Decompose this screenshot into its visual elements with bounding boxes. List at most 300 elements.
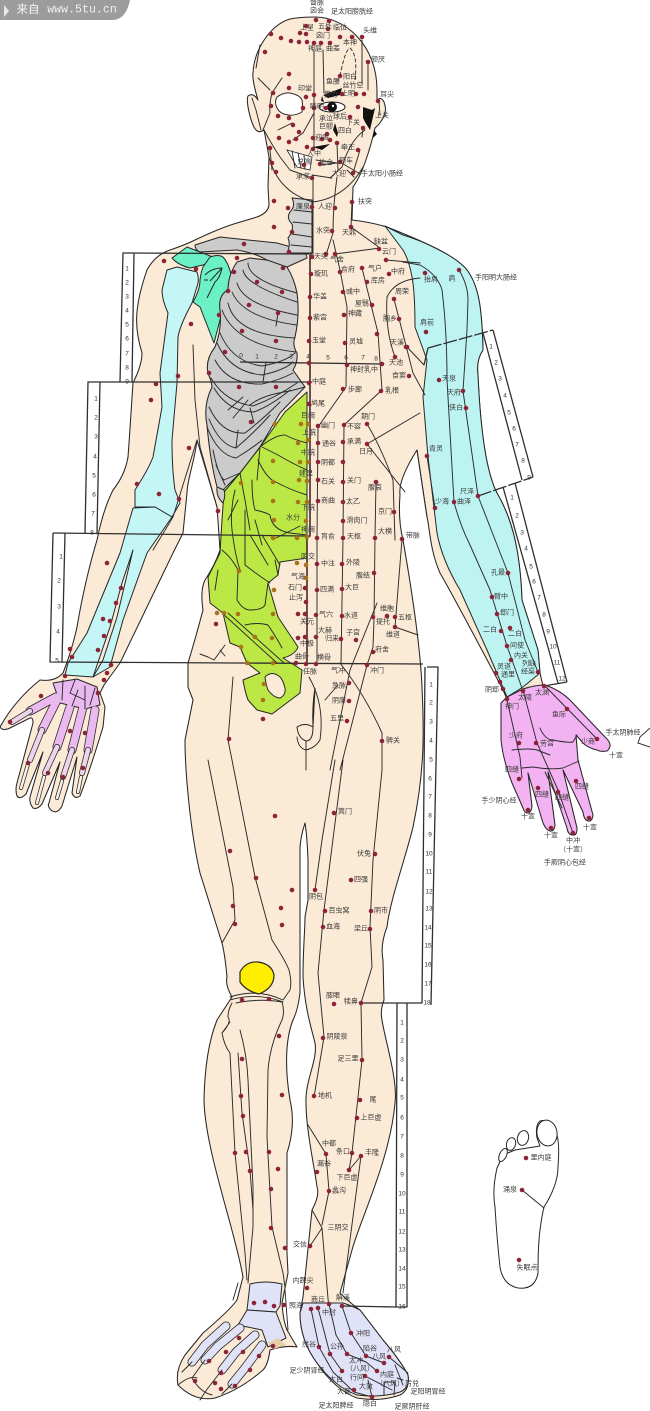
labels: right arm and hand: 手厥阴心包经 bbox=[544, 858, 586, 866]
labels: right arm and hand: 间使 bbox=[510, 640, 524, 650]
ruler: abdomen left: 3 bbox=[57, 604, 61, 610]
labels: chest and abdomen: 水道 bbox=[344, 610, 358, 620]
labels: chest and abdomen: 神藏 bbox=[348, 308, 362, 318]
ruler: lower leg: 12 bbox=[398, 1228, 406, 1236]
labels: chest and abdomen: 归来 bbox=[325, 634, 339, 642]
ruler: chest scale: 2 bbox=[274, 354, 278, 360]
labels: chest and abdomen: 步廊 bbox=[348, 384, 362, 394]
ruler: abdomen left: 2 bbox=[57, 578, 61, 584]
labels: chest and abdomen: 俞府 bbox=[341, 264, 355, 274]
labels: legs: 足三里 bbox=[338, 1054, 358, 1062]
labels: head and neck: 承泣 bbox=[319, 114, 333, 122]
ruler: chest scale: 6 bbox=[344, 354, 348, 362]
labels: chest and abdomen: 关元 bbox=[300, 616, 314, 626]
labels: right arm and hand: 四缝 bbox=[575, 782, 589, 790]
left leg bones bbox=[208, 677, 291, 1287]
labels: right arm and hand: 十宣 bbox=[609, 750, 623, 760]
panel: right hand bbox=[501, 685, 610, 835]
labels: feet: 隐白 bbox=[363, 1398, 377, 1408]
icon: forearm divider bbox=[93, 550, 133, 677]
labels: chest and abdomen: 紫宫 bbox=[313, 312, 327, 322]
labels: feet: 太冲 bbox=[349, 1356, 363, 1364]
labels: chest and abdomen: 天池 bbox=[389, 358, 403, 366]
ruler: chest scale: 7 bbox=[361, 354, 365, 362]
icon: left scapula and clavicle bbox=[172, 247, 232, 343]
labels: head and neck: 人中 bbox=[307, 148, 321, 158]
labels: chest and abdomen: 外陵 bbox=[346, 558, 360, 566]
labels: right arm and hand: 曲泽 bbox=[457, 496, 471, 506]
labels: head and neck: 上关 bbox=[375, 110, 389, 120]
labels: chest and abdomen: 任脉 bbox=[303, 666, 317, 676]
ruler: right forearm: 1 bbox=[510, 494, 514, 502]
labels: right arm and hand: 通里 bbox=[501, 670, 515, 678]
labels: chest and abdomen: 滑肉门 bbox=[346, 516, 368, 524]
labels: head and neck: 廉泉 bbox=[296, 202, 310, 210]
labels: chest and abdomen: 巨阙 bbox=[301, 412, 315, 420]
ruler: thigh: 15 bbox=[424, 942, 432, 950]
labels: right arm and hand: 经渠 bbox=[521, 666, 535, 676]
labels: right arm and hand: 抬肩 bbox=[424, 274, 438, 284]
labels: head and neck bbox=[296, 0, 403, 256]
ruler: lower leg: 6 bbox=[400, 1114, 404, 1122]
labels: head and neck: 下关 bbox=[346, 118, 360, 126]
labels: feet: 大敦 bbox=[359, 1382, 373, 1390]
labels: right arm and hand: 十宣 bbox=[521, 812, 535, 820]
labels: feet: 解溪 bbox=[336, 1292, 350, 1302]
labels: feet: 中封 bbox=[322, 1308, 336, 1316]
ruler: forearm left: 1 bbox=[94, 396, 98, 402]
labels: legs: 血海 bbox=[326, 922, 340, 930]
labels: chest and abdomen: 中注 bbox=[321, 558, 335, 568]
labels: head and neck: 头维 bbox=[363, 26, 377, 34]
ruler: right forearm: 9 bbox=[546, 628, 550, 636]
ruler: abdomen left: 4 bbox=[56, 628, 60, 636]
labels: chest and abdomen: 上脘 bbox=[302, 428, 316, 436]
labels: chest and abdomen: 大赫 bbox=[318, 626, 332, 634]
icon: partial foot at right edge bbox=[638, 728, 650, 747]
labels: right arm and hand: 手少阴心经 bbox=[482, 796, 516, 804]
labels: head and neck: 兑端 bbox=[297, 156, 311, 166]
labels: feet: （八风） bbox=[346, 1364, 374, 1372]
labels: chest and abdomen: 阴都 bbox=[321, 458, 335, 466]
labels: chest and abdomen: 天溪 bbox=[390, 338, 404, 346]
ruler: upper arm left: 6 bbox=[125, 336, 129, 342]
icon: left forearm bones bbox=[65, 507, 172, 677]
labels: head and neck: 云门 bbox=[382, 246, 396, 256]
labels: head and neck: 缺盆 bbox=[374, 236, 388, 246]
ruler: right forearm: 5 bbox=[529, 564, 533, 570]
ruler: right forearm: 12 bbox=[558, 676, 566, 682]
labels: right arm and hand: 侠白 bbox=[449, 402, 463, 412]
ruler: thigh: 14 bbox=[424, 924, 432, 932]
labels: right arm and hand: 内关 bbox=[514, 650, 528, 660]
labels: chest and abdomen: 神阙 bbox=[301, 524, 315, 534]
labels: chest and abdomen: 气冲 bbox=[331, 666, 345, 674]
labels: legs: 阴陵泉 bbox=[326, 1032, 348, 1040]
labels: feet: 里内庭 bbox=[530, 1152, 552, 1162]
ruler: right forearm: 10 bbox=[549, 644, 557, 650]
ruler: lower leg: 7 bbox=[400, 1134, 404, 1140]
labels: chest and abdomen: 提托 bbox=[376, 616, 390, 626]
labels: head and neck: 地仓 bbox=[319, 158, 333, 166]
labels: chest and abdomen: 关门 bbox=[347, 476, 361, 484]
labels: chest and abdomen: 维道 bbox=[386, 630, 400, 638]
labels: chest and abdomen: 期门 bbox=[361, 412, 375, 420]
labels: legs: 伏兔 bbox=[357, 848, 371, 858]
labels: chest and abdomen: 中庭 bbox=[312, 376, 326, 386]
labels: head and neck: 天鼎 bbox=[342, 228, 356, 236]
labels: chest and abdomen: 乳根 bbox=[385, 386, 399, 394]
labels: legs: 阴市 bbox=[374, 906, 388, 914]
labels: right arm and hand: 劳宫 bbox=[540, 738, 554, 748]
ruler: forearm left: 6 bbox=[92, 492, 96, 498]
labels: legs: 蠡沟 bbox=[332, 1186, 346, 1194]
labels: chest and abdomen: 中脘 bbox=[301, 448, 315, 456]
labels: chest and abdomen: 大横 bbox=[378, 526, 392, 536]
labels: right arm and hand: 四缝 bbox=[555, 792, 569, 802]
labels: right arm and hand: 二白 bbox=[508, 628, 522, 638]
watermark tab: www.5tu.cn bbox=[47, 4, 117, 16]
labels: feet: 商丘 bbox=[311, 1294, 325, 1304]
ruler: thigh: 11 bbox=[426, 868, 433, 876]
labels: head and neck: 人迎 bbox=[318, 202, 332, 210]
labels: head and neck: 巨髎 bbox=[319, 122, 333, 130]
ruler: lower leg: 1 bbox=[400, 1020, 404, 1026]
ruler: thigh: 12 bbox=[425, 888, 433, 896]
labels: right arm and hand: 天府 bbox=[447, 388, 461, 396]
labels: chest and abdomen: 商曲 bbox=[321, 496, 335, 504]
labels: chest and abdomen: 府舍 bbox=[375, 644, 389, 654]
labels: head and neck: 睛明 bbox=[310, 102, 324, 110]
labels: right arm and hand: 鱼际 bbox=[552, 710, 566, 718]
ruler: right forearm bbox=[503, 483, 567, 686]
labels: head and neck: 四白 bbox=[338, 126, 352, 134]
ruler: chest scale bbox=[239, 352, 382, 364]
labels: feet: 公孙 bbox=[330, 1342, 344, 1350]
ruler: abdomen left: 1 bbox=[59, 554, 63, 560]
ruler: right upper arm: 4 bbox=[503, 392, 507, 400]
labels: legs: 漏谷 bbox=[317, 1158, 331, 1168]
labels: chest and abdomen: 水分 bbox=[286, 512, 300, 522]
labels: chest and abdomen: 屋翳 bbox=[355, 300, 369, 308]
labels: chest and abdomen: 横骨 bbox=[317, 652, 331, 662]
labels: chest and abdomen: 石门 bbox=[288, 582, 302, 592]
panel: intestines bbox=[200, 392, 307, 714]
labels: right arm and hand: 阴郄 bbox=[485, 684, 499, 694]
labels: chest and abdomen: 子宫 bbox=[346, 628, 360, 636]
labels: chest and abdomen: 带脉 bbox=[406, 530, 420, 540]
labels: feet: （八风） bbox=[376, 1380, 404, 1388]
ruler: lower leg: 8 bbox=[400, 1152, 404, 1160]
labels: right arm and hand: 灵道 bbox=[497, 662, 511, 670]
labels: right arm and hand: 天泉 bbox=[442, 374, 456, 382]
ruler: lower leg: 16 bbox=[398, 1304, 406, 1310]
labels: head and neck: 扶突 bbox=[358, 196, 372, 206]
ruler: forearm left: 7 bbox=[91, 510, 95, 518]
labels: chest and abdomen: 通谷 bbox=[322, 438, 336, 448]
ruler: thigh: 5 bbox=[429, 756, 433, 764]
labels: right arm and hand: 中冲 bbox=[566, 836, 580, 844]
labels: head and neck: 阳白 bbox=[343, 72, 357, 80]
ruler: thigh: 13 bbox=[425, 906, 433, 912]
labels: right arm and hand: 太陵 bbox=[518, 692, 532, 702]
ruler: abdomen left: 5 bbox=[55, 658, 59, 664]
ruler: upper arm left: 3 bbox=[125, 294, 129, 300]
ruler: lower leg: 5 bbox=[400, 1094, 404, 1102]
ruler: thigh: 6 bbox=[428, 776, 432, 782]
ruler: right upper arm: 9 bbox=[527, 474, 531, 482]
labels: head and neck: 囟会 bbox=[310, 6, 324, 14]
labels: chest and abdomen: 京门 bbox=[378, 506, 392, 516]
watermark tab bbox=[0, 0, 130, 20]
ruler: thigh bbox=[361, 667, 438, 1006]
labels: chest and abdomen: 彧中 bbox=[346, 286, 360, 296]
labels: chest and abdomen: 不容 bbox=[347, 422, 361, 430]
icon: patella bbox=[240, 962, 274, 994]
ruler: upper arm left: 1 bbox=[125, 266, 129, 272]
acupoints: amber dots on intestines bbox=[217, 424, 308, 700]
labels: feet: 涌泉 bbox=[503, 1184, 517, 1194]
labels: chest and abdomen: 太乙 bbox=[346, 496, 360, 506]
labels: head and neck: 临位 bbox=[333, 22, 347, 32]
labels: chest and abdomen: 灵墟 bbox=[349, 336, 363, 346]
labels: chest and abdomen: 华盖 bbox=[313, 292, 327, 300]
labels: right arm and hand: 少海 bbox=[435, 496, 449, 506]
labels: feet: 冲阳 bbox=[356, 1328, 370, 1338]
labels: right arm and hand: 手太阴肺经 bbox=[606, 728, 640, 736]
ruler: right upper arm: 5 bbox=[507, 410, 511, 416]
ruler: thigh: 2 bbox=[429, 700, 433, 706]
labels: head and neck: 迎香 bbox=[315, 132, 329, 142]
labels: legs bbox=[292, 806, 388, 1284]
labels: head and neck: 攒竹 bbox=[324, 90, 338, 98]
ruler: right upper arm: 1 bbox=[489, 344, 493, 350]
labels: chest and abdomen: 维胞 bbox=[380, 604, 394, 612]
labels: chest and abdomen: 四满 bbox=[320, 584, 334, 594]
ruler: upper arm left bbox=[120, 253, 312, 386]
meridian lines on the torso bbox=[153, 240, 425, 1310]
labels: chest and abdomen: 库房 bbox=[371, 276, 385, 284]
ruler: upper arm left: 9 bbox=[125, 378, 129, 386]
labels: feet: 八风 bbox=[372, 1352, 386, 1360]
left hand bones bbox=[12, 679, 100, 803]
ruler: right upper arm: 7 bbox=[515, 442, 519, 448]
labels: chest and abdomen: 天枢 bbox=[347, 532, 361, 540]
ruler: right upper arm: 8 bbox=[521, 458, 525, 464]
labels: head and neck: 鱼腰 bbox=[326, 76, 340, 86]
ruler: chest scale: 8 bbox=[374, 356, 378, 362]
labels: feet: 厉兑 bbox=[405, 1378, 419, 1388]
ruler: right forearm: 8 bbox=[542, 612, 546, 618]
labels: chest and abdomen: 幽门 bbox=[321, 420, 335, 430]
labels: head and neck: 五处 bbox=[318, 22, 332, 30]
ruler: upper arm left: 2 bbox=[125, 280, 129, 286]
labels: head and neck: 本神 bbox=[343, 38, 357, 46]
labels: chest and abdomen: 中极 bbox=[300, 638, 314, 648]
ruler: chest scale: 0 bbox=[239, 352, 243, 360]
labels: legs: 阴包 bbox=[309, 892, 323, 900]
ruler: lower leg: 10 bbox=[398, 1190, 406, 1198]
icon: clavicle and neck vertebrae bbox=[195, 198, 312, 267]
labels: chest and abdomen: 五里 bbox=[330, 714, 344, 722]
labels: feet: 足阳明胃经 bbox=[410, 1386, 446, 1396]
ruler: thigh: 10 bbox=[425, 850, 433, 858]
labels: head and neck: 耳尖 bbox=[380, 90, 394, 98]
labels: chest and abdomen: 髀关 bbox=[386, 736, 400, 744]
labels: feet: 失眠点 bbox=[516, 1262, 538, 1272]
ruler: lower leg bbox=[342, 1003, 407, 1310]
labels: legs: 条口 bbox=[336, 1146, 350, 1156]
ruler: chest scale: 3 bbox=[289, 354, 293, 360]
ruler: upper arm left: 5 bbox=[125, 322, 129, 328]
labels: feet: 太白 bbox=[329, 1374, 343, 1384]
labels: head and neck: 牵正 bbox=[341, 142, 355, 152]
ruler: forearm left: 8 bbox=[90, 530, 94, 536]
labels: chest and abdomen: 气户 bbox=[368, 264, 382, 272]
right arm meridians bbox=[403, 262, 538, 691]
ruler: lower leg: 4 bbox=[400, 1076, 404, 1084]
labels: feet: 行间 bbox=[350, 1372, 364, 1382]
labels: chest and abdomen: 气海 bbox=[291, 572, 305, 580]
ruler: lower leg: 3 bbox=[400, 1056, 404, 1064]
labels: chest and abdomen: 腹哀 bbox=[368, 482, 382, 492]
labels: legs: 犊鼻 bbox=[344, 996, 358, 1006]
labels: legs: 百虫窝 bbox=[328, 906, 350, 914]
labels: right arm and hand: 肩 bbox=[448, 274, 456, 282]
ruler: right upper arm: 3 bbox=[498, 376, 502, 382]
labels: right arm and hand: 手阳明大肠经 bbox=[475, 272, 517, 282]
left foot bones bbox=[178, 1282, 288, 1400]
labels: legs: 丰隆 bbox=[365, 1148, 379, 1156]
labels: legs: 下巨虚 bbox=[336, 1172, 358, 1182]
labels: head and neck: 承浆 bbox=[296, 172, 310, 180]
labels: chest and abdomen: 肓俞 bbox=[321, 532, 335, 540]
ruler: thigh: 1 bbox=[429, 682, 433, 688]
labels: chest and abdomen: 日月 bbox=[359, 448, 373, 456]
ruler: lower leg: 13 bbox=[398, 1246, 406, 1254]
labels: chest and abdomen: 璇玑 bbox=[314, 268, 328, 278]
labels: legs: 上巨虚 bbox=[360, 1112, 382, 1122]
ruler: lower leg: 2 bbox=[400, 1038, 404, 1044]
labels: legs: 梁丘 bbox=[354, 924, 368, 932]
ruler: thigh: 8 bbox=[428, 812, 432, 820]
labels: legs: 箕门 bbox=[338, 806, 352, 816]
icon: left humerus bbox=[135, 267, 198, 517]
ruler: forearm left: 2 bbox=[94, 414, 98, 422]
labels: right arm and hand: 神门 bbox=[505, 702, 519, 710]
ruler: thigh: 9 bbox=[428, 832, 432, 838]
labels: right arm and hand: 十宣 bbox=[544, 830, 558, 840]
labels: feet: 陷谷 bbox=[363, 1344, 377, 1352]
labels: chest and abdomen: 曲骨 bbox=[295, 652, 309, 660]
ruler: lower leg: 9 bbox=[400, 1172, 404, 1178]
labels: chest and abdomen: 玉堂 bbox=[312, 336, 326, 344]
labels: legs: 地机 bbox=[318, 1090, 332, 1100]
ruler: right forearm: 3 bbox=[520, 530, 524, 536]
labels: feet: 足太阳脾经 bbox=[318, 1400, 354, 1410]
ruler: chest scale: 5 bbox=[326, 354, 330, 362]
ruler: thigh: 4 bbox=[429, 738, 433, 744]
ruler: thigh: 17 bbox=[424, 980, 432, 988]
labels: chest and abdomen: 止泻 bbox=[289, 592, 303, 602]
labels: head and neck: 印堂 bbox=[298, 84, 312, 92]
labels: legs: 内踝尖 bbox=[292, 1276, 314, 1284]
panel: rib cage bbox=[206, 258, 305, 503]
labels: right arm and hand: 臂中 bbox=[494, 592, 508, 600]
ruler: right forearm: 2 bbox=[515, 512, 519, 520]
labels: chest and abdomen: 五枢 bbox=[398, 612, 412, 622]
right foot bones and meridians bbox=[300, 1303, 408, 1397]
labels: chest and abdomen: 阴交 bbox=[301, 552, 315, 560]
labels: head and neck: 丝竹空 bbox=[342, 80, 364, 90]
labels: right arm and hand bbox=[420, 272, 640, 866]
labels: legs: 四强 bbox=[354, 876, 368, 884]
labels: right arm and hand: （十宣） bbox=[559, 844, 587, 854]
labels: right arm and hand: 少府 bbox=[509, 730, 523, 740]
labels: right arm and hand: 少商 bbox=[581, 736, 595, 746]
labels: feet: 足少阴肾经 bbox=[290, 1366, 324, 1374]
ruler: thigh: 16 bbox=[424, 962, 432, 968]
ruler: lower leg: 11 bbox=[399, 1208, 406, 1216]
ruler: right forearm: 11 bbox=[554, 660, 561, 666]
labels: head and neck: 上星 bbox=[300, 22, 314, 32]
labels: legs: 交信 bbox=[293, 1240, 307, 1248]
watermark tab: 来自 bbox=[16, 3, 40, 16]
labels: chest and abdomen: 承满 bbox=[347, 436, 361, 446]
labels: head and neck: 球后 bbox=[333, 112, 347, 120]
labels: chest and abdomen: 中府 bbox=[391, 266, 405, 276]
labels: right arm and hand: 青灵 bbox=[429, 444, 443, 452]
ruler: forearm left: 3 bbox=[94, 434, 98, 440]
labels: right arm and hand: 肩前 bbox=[420, 318, 434, 326]
labels: chest and abdomen: 周荣 bbox=[395, 286, 409, 296]
ruler: abdomen left bbox=[50, 533, 423, 664]
labels: feet: 然谷 bbox=[302, 1340, 316, 1348]
labels: head and neck: 足太阳膀胱经 bbox=[331, 6, 373, 16]
labels: chest and abdomen: 食窦 bbox=[392, 370, 406, 380]
labels: legs: 中都 bbox=[322, 1138, 336, 1148]
labels: chest and abdomen: 大巨 bbox=[345, 582, 359, 592]
labels: head and neck: 囟门 bbox=[316, 30, 330, 40]
labels: legs: 膝眼 bbox=[326, 990, 340, 1000]
labels: head and neck: 颔厌 bbox=[371, 54, 385, 64]
labels: head and neck: 水突 bbox=[316, 226, 330, 234]
labels: chest and abdomen: 石关 bbox=[321, 476, 335, 486]
ruler: right forearm: 7 bbox=[537, 594, 541, 602]
labels: head and neck: 曲差 bbox=[326, 44, 340, 52]
labels: right arm and hand: 二白 bbox=[483, 624, 497, 634]
labels: legs: 三阴交 bbox=[328, 1222, 348, 1232]
labels: feet: 足厥阴肝经 bbox=[394, 1402, 430, 1410]
labels: right arm and hand: 太渊 bbox=[535, 688, 549, 696]
labels: chest and abdomen: 腹结 bbox=[356, 570, 370, 580]
labels: feet bbox=[289, 1152, 552, 1410]
labels: chest and abdomen: 气穴 bbox=[319, 610, 333, 618]
ruler: upper arm left: 4 bbox=[125, 308, 129, 314]
labels: chest and abdomen bbox=[286, 252, 420, 744]
labels: feet: 内庭 bbox=[380, 1370, 394, 1378]
ruler: upper arm left: 7 bbox=[125, 350, 129, 358]
labels: right arm and hand: 十宣 bbox=[583, 822, 597, 832]
labels: chest and abdomen: 气舍 bbox=[330, 254, 344, 264]
ruler: thigh: 3 bbox=[429, 718, 433, 726]
ruler: upper arm left: 8 bbox=[125, 364, 129, 372]
labels: feet: 照海 bbox=[289, 1300, 303, 1310]
labels: chest and abdomen: 下脘 bbox=[301, 502, 315, 512]
panel: right arm meridian band bbox=[385, 226, 540, 697]
ruler: thigh: 18 bbox=[423, 1000, 431, 1006]
ruler: right upper arm: 6 bbox=[512, 426, 516, 432]
